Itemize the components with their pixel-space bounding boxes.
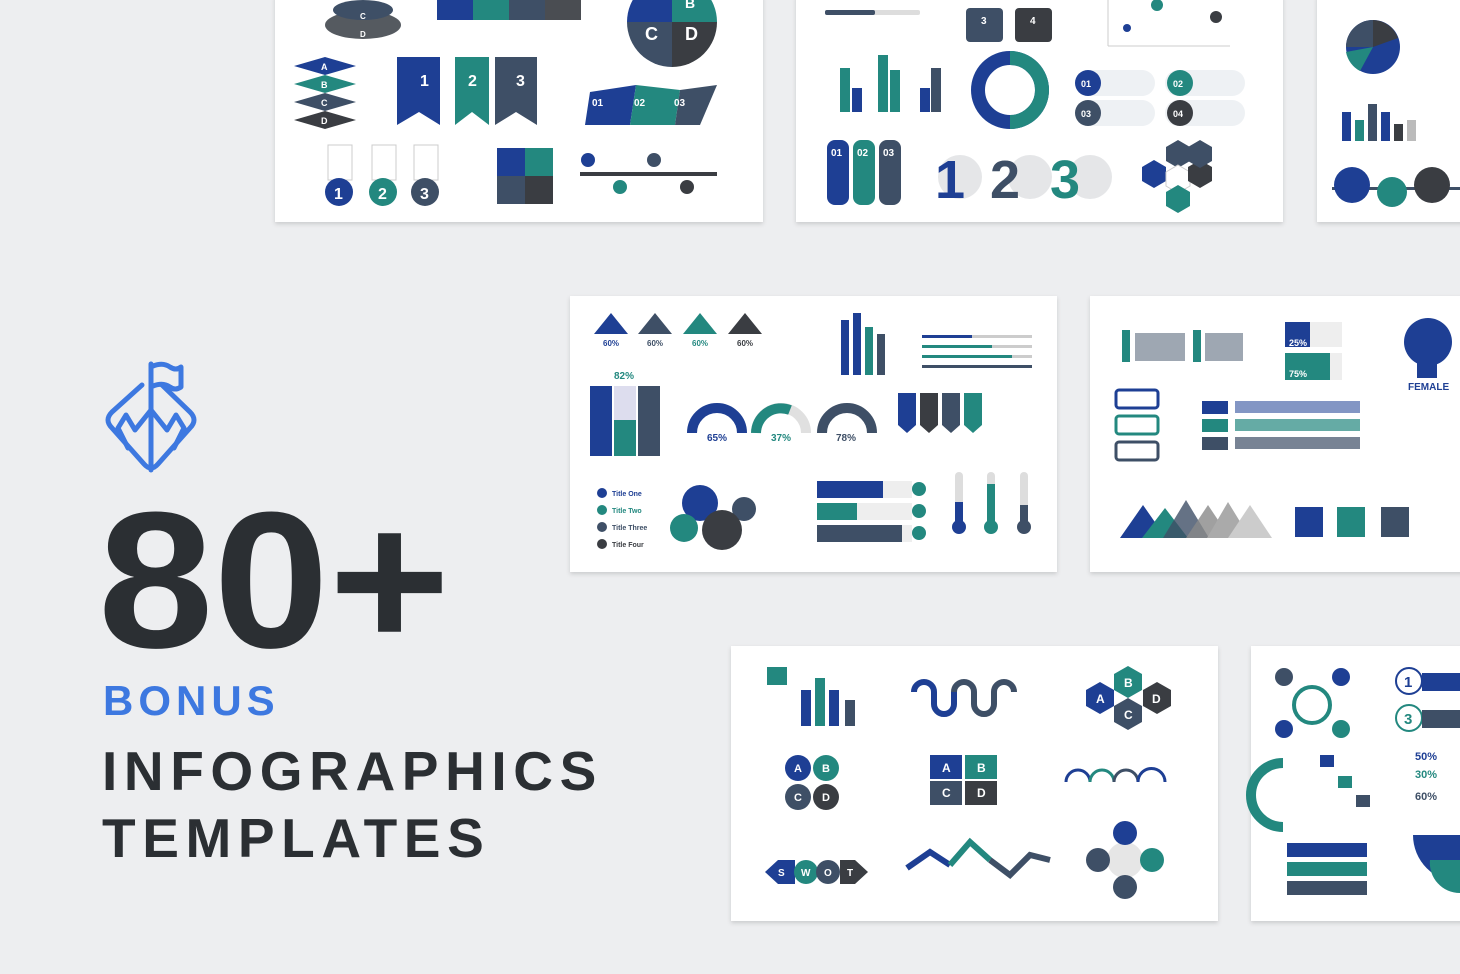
card 6: S xyxy=(778,868,785,879)
card 6: W xyxy=(801,868,811,879)
semicircles: 37% xyxy=(771,433,791,444)
card 2 xyxy=(796,0,1283,222)
pie ABCD: C xyxy=(645,24,658,44)
parallelogram band: 03 xyxy=(674,98,686,109)
card 4 xyxy=(570,296,1057,572)
pills: 04 xyxy=(1173,109,1183,119)
numbered circles xyxy=(325,145,439,206)
card 2: 4 xyxy=(1030,16,1036,27)
bookmarks: 2 xyxy=(468,73,477,90)
card 7: 3 xyxy=(1404,711,1412,728)
big digits: 2 xyxy=(990,150,1020,210)
bubbles xyxy=(670,485,756,550)
card 5 xyxy=(1090,296,1460,572)
head: FEMALE xyxy=(1408,382,1449,393)
slider lines xyxy=(922,335,1032,368)
parallelogram band: 01 xyxy=(592,98,604,109)
stacked diamonds: C xyxy=(321,98,328,108)
card 6: A xyxy=(942,761,951,775)
horizontal bars xyxy=(817,481,926,542)
vertical bars xyxy=(841,313,885,375)
stacked diamonds: A xyxy=(321,62,328,72)
title: INFOGRAPHICS TEMPLATES: TEMPLATES xyxy=(102,807,490,869)
card 7: 1 xyxy=(1404,674,1412,691)
parallelogram band xyxy=(585,85,717,125)
cylinder xyxy=(325,0,401,39)
columns 01 02 03 xyxy=(827,140,901,205)
legend list xyxy=(597,488,647,549)
card 6: B xyxy=(977,761,986,775)
card 7: 60% xyxy=(1415,791,1437,803)
subheading: BONUS: BONUS xyxy=(103,677,280,724)
pie ABCD: D xyxy=(685,24,698,44)
card 6: C xyxy=(794,792,802,804)
columns 01 02 03: 01 xyxy=(831,148,843,159)
card 6: O xyxy=(824,868,832,879)
semicircles xyxy=(692,408,872,444)
triangles xyxy=(594,313,762,348)
pills: 01 xyxy=(1081,79,1091,89)
card 6: B xyxy=(1124,676,1133,690)
semicircles: 78% xyxy=(836,433,856,444)
card 5: 75% xyxy=(1289,369,1307,379)
parallelogram band: 02 xyxy=(634,98,646,109)
pills: 03 xyxy=(1081,109,1091,119)
triangles: 60% xyxy=(737,339,753,348)
stacked diamonds: B xyxy=(321,80,328,90)
pills: 02 xyxy=(1173,79,1183,89)
bookmarks xyxy=(397,57,537,125)
cylinder: D xyxy=(360,30,366,39)
legend list: Title One xyxy=(612,491,642,498)
big digits: 1 xyxy=(935,150,965,210)
card 6: C xyxy=(1124,708,1133,722)
legend list: Title Two xyxy=(612,508,642,515)
bar chart xyxy=(840,55,941,112)
people rows xyxy=(1122,330,1243,362)
triangles: 60% xyxy=(647,339,663,348)
legend list: Title Four xyxy=(612,542,644,549)
numbered shields xyxy=(898,393,982,433)
triangles: 60% xyxy=(603,339,619,348)
columns 01 02 03: 03 xyxy=(883,148,895,159)
bookmarks: 1 xyxy=(420,73,429,90)
card 7: 50% xyxy=(1415,751,1437,763)
card 6: D xyxy=(977,786,986,800)
heading: 80+: 80+ xyxy=(98,472,450,689)
ring xyxy=(978,58,1042,122)
card 6: D xyxy=(1152,692,1161,706)
numbered circles: 2 xyxy=(378,186,387,203)
legend list: Title Three xyxy=(612,525,647,532)
icon: logo mountain flag xyxy=(108,364,194,470)
card 5: 25% xyxy=(1289,338,1307,348)
card 6: T xyxy=(847,868,853,879)
big digits xyxy=(935,150,1112,210)
card 6: A xyxy=(1096,692,1105,706)
card 1 xyxy=(275,0,763,222)
stacked diamonds: D xyxy=(321,116,328,126)
card 7: 30% xyxy=(1415,769,1437,781)
card 6: D xyxy=(822,792,830,804)
stacked bars 82% xyxy=(590,371,660,456)
cubes xyxy=(437,0,581,20)
card 7 xyxy=(1251,646,1460,921)
card 3 xyxy=(1317,0,1460,222)
bookmarks: 3 xyxy=(516,73,525,90)
card 6: C xyxy=(942,786,951,800)
pills xyxy=(1075,70,1245,126)
hexagons xyxy=(1142,140,1212,213)
card 6: A xyxy=(794,763,802,775)
stacked bars 82%: 82% xyxy=(614,371,634,382)
card 6 xyxy=(731,646,1218,921)
thermometers xyxy=(952,472,1031,534)
stacked diamonds xyxy=(294,57,356,129)
semicircles: 65% xyxy=(707,433,727,444)
pie ABCD xyxy=(627,0,717,67)
head xyxy=(1404,318,1452,393)
numbered circles: 1 xyxy=(334,186,343,203)
numbered circles: 3 xyxy=(420,186,429,203)
big digits: 3 xyxy=(1050,150,1080,210)
timeline xyxy=(580,153,717,194)
cylinder: C xyxy=(360,12,366,21)
puzzle xyxy=(497,148,553,204)
title: INFOGRAPHICS TEMPLATES xyxy=(102,740,603,869)
card 6: B xyxy=(822,763,830,775)
mountains xyxy=(1120,500,1272,538)
columns 01 02 03: 02 xyxy=(857,148,869,159)
triangles: 60% xyxy=(692,339,708,348)
card 2: 3 xyxy=(981,16,987,27)
title: INFOGRAPHICS TEMPLATES: INFOGRAPHICS xyxy=(102,740,603,802)
